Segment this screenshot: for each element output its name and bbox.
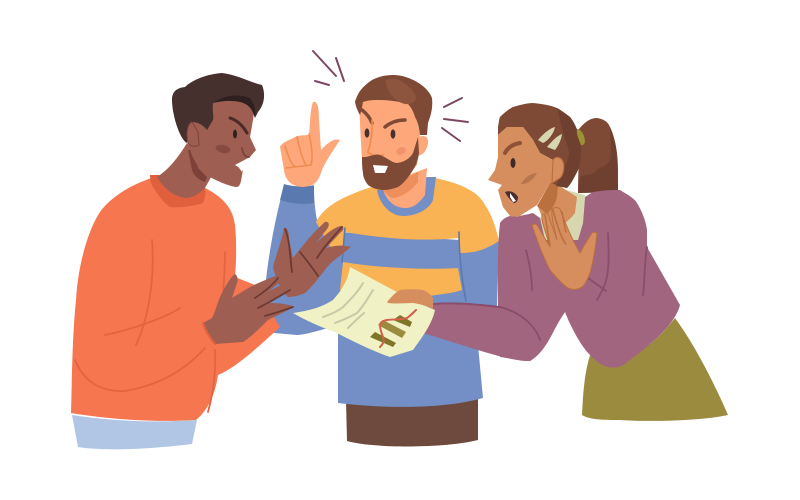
woman arm shadow line — [434, 303, 500, 307]
shout marks — [313, 51, 468, 141]
paper sheet — [293, 267, 435, 357]
middle man torso yellow lower — [340, 262, 462, 296]
woman ponytail — [578, 118, 618, 193]
middle man mouth — [373, 165, 388, 173]
text lines — [323, 283, 373, 328]
woman face — [488, 127, 553, 217]
woman collar — [538, 190, 585, 240]
woman hair — [498, 103, 581, 188]
left man sweater folds — [75, 240, 225, 412]
middle man neck — [382, 168, 427, 208]
woman's hand holding paper — [387, 289, 433, 309]
left man collar — [150, 175, 205, 207]
red scribble — [380, 310, 416, 347]
middle man face — [360, 95, 420, 174]
woman sweater — [498, 190, 680, 368]
left man hair — [172, 73, 264, 143]
document — [293, 267, 435, 357]
woman eyebrow, eye, cheek, mouth — [505, 143, 520, 153]
woman hand on chest — [532, 208, 597, 289]
woman finger lines — [545, 210, 566, 245]
left man face — [188, 95, 256, 187]
left man neck — [157, 143, 215, 198]
woman neck — [538, 183, 577, 232]
bar chart on paper — [370, 315, 412, 347]
middle man trousers — [346, 398, 478, 446]
woman skirt — [582, 318, 728, 421]
middle man hair — [355, 75, 432, 135]
figure: woman — [423, 103, 728, 421]
woman hair clips — [538, 127, 555, 143]
raised hand — [280, 102, 340, 187]
left man ear — [187, 122, 199, 146]
middle man ear — [416, 136, 428, 156]
left man mouth — [237, 163, 245, 172]
raised hand finger lines — [285, 134, 312, 168]
left man cheek, eye, brow — [215, 144, 231, 154]
figure: left man — [71, 73, 351, 449]
left man upper hand — [273, 222, 351, 297]
woman hair tie — [577, 129, 585, 145]
middle man beard — [362, 137, 419, 190]
left man lower hand — [203, 274, 293, 344]
middle man sleeve seams — [342, 228, 466, 301]
middle man left sleeve — [265, 186, 345, 335]
lower hand finger lines — [255, 278, 293, 316]
middle man brow and eyes — [362, 110, 372, 123]
lower hand cuff — [203, 323, 215, 344]
woman ear — [552, 158, 564, 183]
left man sweater — [71, 177, 280, 421]
woman arm to paper — [423, 303, 565, 361]
middle man torso blue — [338, 232, 499, 407]
woman sweater fold lines — [500, 233, 647, 340]
middle man torso yellow upper — [316, 178, 499, 255]
left man pants — [72, 415, 197, 449]
sleeve cuff shade — [280, 184, 314, 204]
left man upper hand lines — [285, 227, 342, 276]
middle man collar — [377, 177, 436, 216]
figure: middle man — [265, 51, 499, 446]
middle man nose — [368, 120, 383, 156]
